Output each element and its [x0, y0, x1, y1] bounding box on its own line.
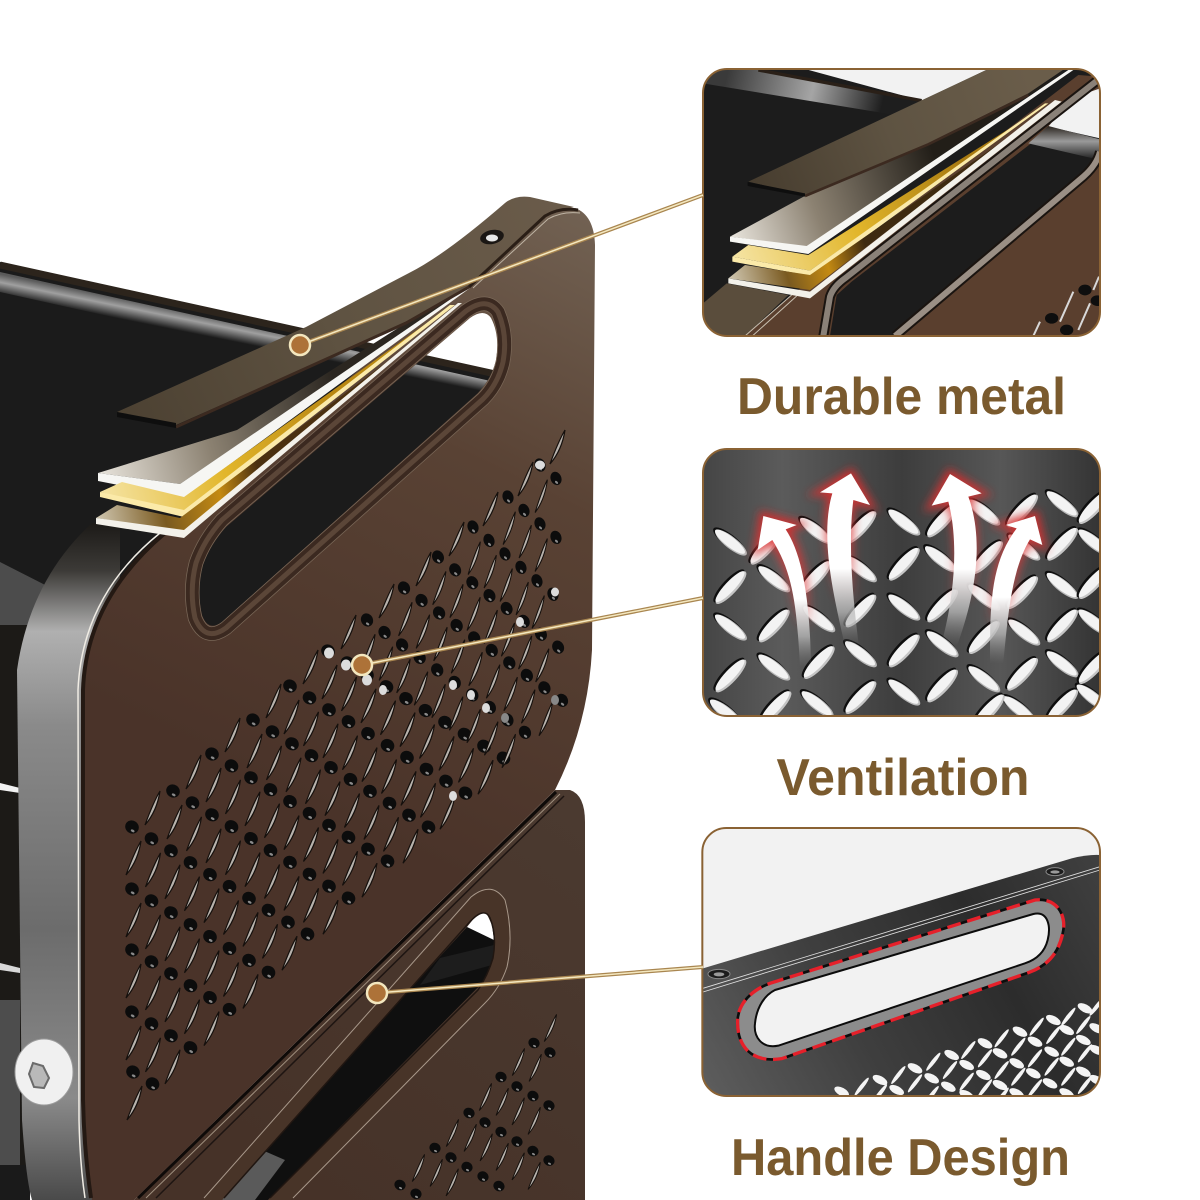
- heading: Durable metal: Durable metal: [737, 368, 1066, 426]
- top unit side panel with handle cut-out: [84, 208, 595, 1200]
- bottom metal layer: [96, 303, 462, 538]
- heading: Handle Design: Handle Design: [731, 1129, 1070, 1187]
- heading: Ventilation: Ventilation: [776, 749, 1030, 807]
- second unit handle window: [203, 889, 510, 1200]
- handle ring of top unit: [192, 304, 505, 634]
- top unit perforations: dots and slits: [123, 430, 570, 1120]
- panel left edge highlight: [78, 533, 165, 1198]
- panel: durable metal closeup: [703, 69, 1104, 336]
- red dashed outline: [738, 900, 1064, 1059]
- panel: ventilation closeup: [703, 449, 1114, 731]
- panel: handle design closeup: [702, 828, 1106, 1107]
- silver side rail: [17, 523, 120, 1200]
- yellow coating layer: [100, 305, 455, 517]
- perforation pattern: [833, 997, 1106, 1107]
- callout: handle design leader line: [367, 967, 703, 1003]
- second unit side panel: [134, 790, 585, 1200]
- callout: ventilation leader line: [352, 598, 703, 675]
- white hex screw: [15, 1039, 73, 1105]
- airflow arrow 3: [932, 474, 982, 647]
- second unit perforations: [392, 1014, 558, 1200]
- screw holes: [708, 868, 1064, 979]
- airflow arrow 4: [990, 516, 1042, 663]
- peeled top strip and ear: [117, 197, 580, 428]
- red heat glow behind arrows: [748, 464, 1054, 624]
- product: shelf organizer with perforated side panels: [0, 197, 595, 1200]
- airflow arrow 1: [758, 516, 811, 667]
- callout: durable metal leader line: [290, 195, 703, 355]
- leaf-shaped vent holes: [705, 485, 1114, 731]
- back tray of the top shelf: [0, 262, 500, 700]
- airflow arrow 2: [820, 473, 870, 647]
- stacked panel edge lines: [138, 792, 564, 1198]
- white metal layer: [98, 288, 470, 498]
- handle slot with metal ring: [738, 900, 1064, 1059]
- see-through white holes: [324, 460, 559, 801]
- lower shelves on the left edge: [0, 625, 30, 1200]
- ear screw hole: [479, 228, 505, 246]
